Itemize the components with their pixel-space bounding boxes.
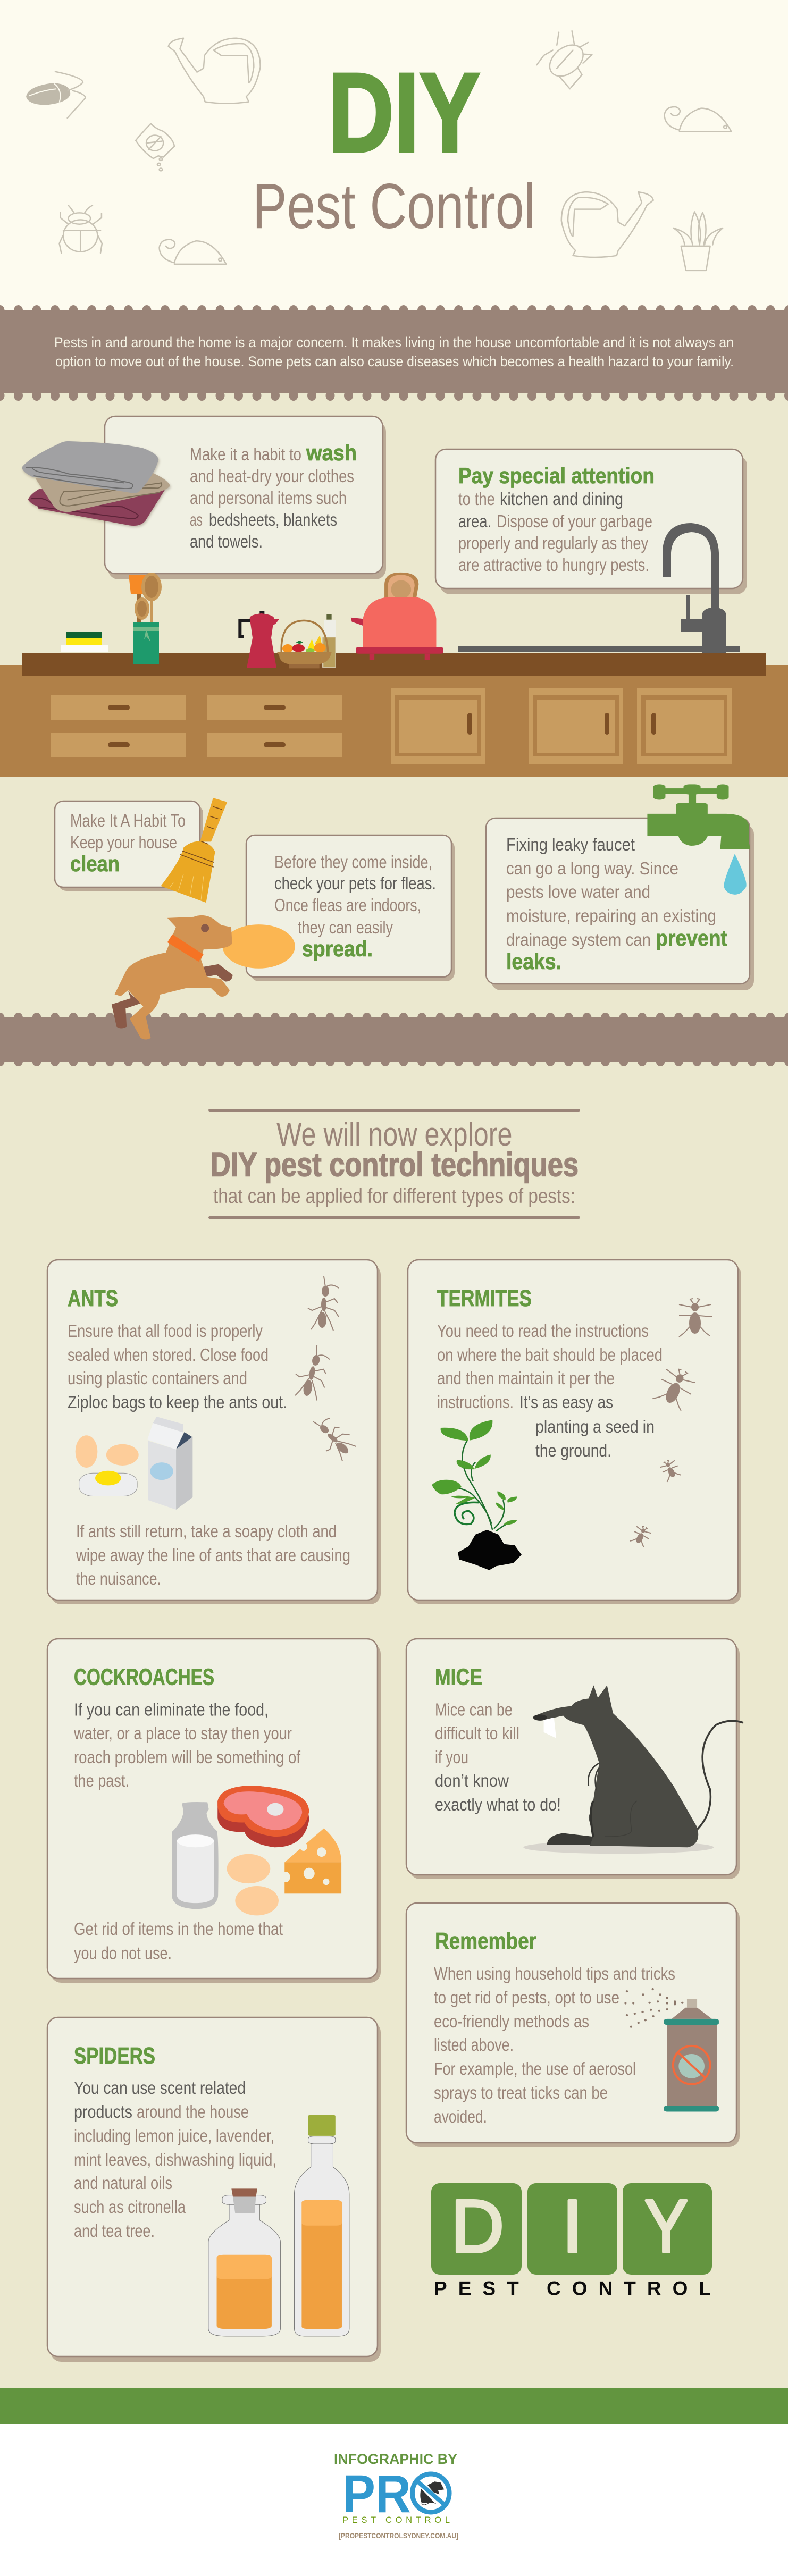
panel: keep clean (55, 801, 203, 891)
heading: techniques intro: We will now explore (276, 1116, 513, 1153)
logo: DIY Pest Control: D (451, 2184, 504, 2268)
text: termites advice: on where the bait should be placed (437, 1345, 663, 1365)
panel: wash: and towels. (190, 532, 263, 551)
icon: sink and tap (458, 523, 740, 653)
icon: eggs and milk carton (76, 1417, 192, 1510)
panel: keep clean: Keep your house (70, 832, 177, 852)
panel: spiders (47, 2017, 381, 2362)
text: remember advice: avoided. (434, 2107, 487, 2126)
panel: fleas: spread. (302, 936, 373, 961)
panel: leaky faucet: pests love water and (506, 882, 650, 902)
panel: wash: bedsheets, blankets (209, 510, 337, 529)
text: mice advice: difficult to kill (435, 1723, 519, 1743)
panel: kitchen attention: kitchen and dining (500, 489, 623, 509)
icon: coffee pot and fruit basket (238, 611, 336, 668)
panel: ants (47, 1260, 381, 1604)
text: termites advice (437, 1321, 663, 1460)
panel: leaky faucet: can go a long way. Since (506, 858, 678, 878)
text: ants advice: using plastic containers and (68, 1368, 247, 1388)
band: introduction: Pests in and around the home is a major concern. It makes living in the house uncomfortable and it is not always an (54, 334, 734, 350)
text: cockroaches advice: water, or a place to stay then your (73, 1723, 292, 1743)
icon: utensil jar (129, 573, 162, 664)
text: mice advice: Mice can be (435, 1700, 513, 1719)
icons: termites (630, 1299, 712, 1548)
panel: wash (105, 416, 386, 579)
band: divider with scallops (0, 1013, 788, 1066)
text: cockroaches advice: Get rid of items in the home that (74, 1919, 283, 1939)
text: ants advice: If ants still return, take a soapy cloth and (76, 1521, 337, 1541)
panel: keep clean: Make It A Habit To (70, 811, 186, 830)
panel: kitchen attention: properly and regularly as they (458, 533, 648, 553)
text: cockroaches advice: roach problem will be something of (74, 1747, 301, 1767)
logo: DIY Pest Control: I (562, 2184, 583, 2268)
panel: fleas (246, 835, 455, 981)
band: green footer strip (0, 2388, 788, 2424)
text: cockroaches advice: the past. (74, 1771, 129, 1790)
heading: mice: MICE (435, 1664, 482, 1690)
panel: kitchen attention: area. (458, 511, 491, 531)
cabinet doors (391, 688, 732, 764)
text: mice advice (435, 1700, 561, 1814)
text: termites advice: and then maintain it per the (437, 1368, 615, 1388)
panel: cockroaches (47, 1639, 381, 1983)
panel: fleas: they can easily (298, 917, 393, 937)
text: remember advice: When using household tips and tricks (434, 1964, 675, 1983)
icon: faucet and drop (647, 784, 750, 895)
icon: broom (161, 798, 227, 903)
icon: aerosol spray (624, 1988, 719, 2112)
icon: watering can right (561, 192, 653, 257)
icon: seedling (432, 1420, 522, 1570)
footer: credit: PEST CONTROL (342, 2515, 450, 2525)
text: termites advice: You need to read the instructions (437, 1321, 649, 1341)
band: introduction: option to move out of the house. Some pets can also cause diseases which becomes a health hazard to your family. (55, 353, 734, 369)
text: remember advice (434, 1964, 675, 2126)
text: remember advice: eco-friendly methods as (434, 2011, 589, 2031)
icon: potted plant (674, 212, 723, 271)
panel: wash: Make it a habit to (190, 444, 301, 464)
icon: no-rat ring (412, 2474, 449, 2512)
text: ants advice (68, 1321, 350, 1588)
panel: fleas: Once fleas are indoors, (274, 895, 421, 915)
icon: beetle top (536, 31, 592, 89)
panel: leaky faucet: moisture, repairing an existing (506, 906, 716, 925)
text: termites advice: instructions. (437, 1392, 514, 1412)
drawers (51, 695, 342, 757)
panel: kitchen attention: Pay special attention (458, 463, 655, 488)
text: remember advice: For example, the use of aerosol (434, 2059, 636, 2078)
text: ants advice: Ziploc bags to keep the ants out. (68, 1392, 287, 1412)
icon: mouse left (160, 240, 226, 264)
panel: wash: as (190, 510, 203, 529)
panel: kitchen attention: to the (458, 489, 495, 509)
text: remember advice: to get rid of pests, opt to use (434, 1988, 619, 2007)
icon: rat (523, 1685, 743, 1854)
text: ants advice: wipe away the line of ants that are causing (76, 1545, 350, 1565)
text: termites advice: the ground. (535, 1441, 611, 1460)
heading: cockroaches: COCKROACHES (74, 1664, 214, 1690)
panel: remember (406, 1903, 740, 2147)
title: Pest Control: Pest Control (253, 171, 535, 242)
panel: wash: and personal items such (190, 488, 347, 508)
text: termites advice: planting a seed in (535, 1417, 655, 1436)
text: spiders advice (74, 2078, 276, 2241)
icon: beetle left (60, 205, 102, 253)
text: mice advice: exactly what to do! (435, 1795, 561, 1814)
text: cockroaches advice (73, 1700, 301, 1963)
panel: fleas: check your pets for fleas. (274, 873, 436, 893)
heading: techniques intro: that can be applied for different types of pests: (213, 1185, 575, 1208)
logo: DIY Pest Control (431, 2183, 712, 2300)
panel: keep clean: clean (70, 851, 120, 876)
text: ants advice: the nuisance. (76, 1569, 161, 1588)
heading: ants: ANTS (68, 1285, 118, 1311)
text: spiders advice: products (74, 2102, 132, 2122)
text: spiders advice: and tea tree. (74, 2221, 155, 2241)
icon: sponge (61, 632, 108, 652)
text: mice advice: don’t know (435, 1771, 509, 1790)
panel: kitchen attention: are attractive to hungry pests. (458, 555, 649, 575)
icon: watering can (169, 38, 261, 104)
panel: leaky faucet: leaks. (506, 949, 561, 974)
icon: bait packet (136, 124, 174, 171)
icons: ants (292, 1276, 359, 1464)
icon: dog with ball (112, 915, 295, 1040)
panel: leaky faucet (486, 818, 754, 990)
illustration: kitchen counter (0, 653, 788, 777)
icon: toaster (351, 573, 443, 660)
heading: remember: Remember (435, 1928, 536, 1954)
panel: leaky faucet: drainage system can (506, 930, 651, 949)
text: termites advice: It’s as easy as (519, 1392, 613, 1412)
panel: leaky faucet: Fixing leaky faucet (506, 835, 635, 854)
text: ants advice: sealed when stored. Close food (68, 1345, 269, 1365)
text: cockroaches advice: you do not use. (74, 1943, 172, 1963)
icon: milk, meat, eggs and cheese (172, 1786, 341, 1915)
title: DIY: DIY (328, 49, 480, 175)
logo: DIY Pest Control: PEST CONTROL (434, 2277, 711, 2300)
heading: spiders: SPIDERS (74, 2043, 155, 2069)
panel: termites (408, 1260, 741, 1604)
icon: oil bottles (208, 2115, 349, 2336)
panel: kitchen attention: Dispose of your garbage (497, 511, 652, 531)
text: ants advice: Ensure that all food is properly (68, 1321, 263, 1341)
text: spiders advice: mint leaves, dishwashing liquid, (74, 2150, 276, 2169)
panel: wash: wash (306, 440, 357, 465)
icon: cockroach (26, 72, 86, 118)
panel: mice (406, 1639, 743, 1879)
footer: credit: INFOGRAPHIC BY (334, 2451, 457, 2467)
text: spiders advice: You can use scent related (74, 2078, 246, 2098)
icon: folded towels (22, 441, 170, 526)
footer: credit: PR (342, 2464, 411, 2524)
panel: wash: and heat-dry your clothes (190, 466, 354, 486)
footer: credit (334, 2451, 458, 2540)
header line-art icons (26, 31, 731, 271)
heading: termites: TERMITES (437, 1285, 532, 1311)
heading: techniques intro (208, 1109, 580, 1219)
text: mice advice: if you (435, 1747, 468, 1767)
text: spiders advice: such as citronella (74, 2197, 186, 2217)
text: remember advice: listed above. (434, 2035, 514, 2055)
text: spiders advice: and natural oils (74, 2173, 172, 2193)
footer: credit: [PROPESTCONTROLSYDNEY.COM.AU] (339, 2531, 458, 2540)
icon: mouse right (665, 107, 731, 131)
text: spiders advice: around the house (137, 2102, 249, 2122)
text: cockroaches advice: If you can eliminate the food, (74, 1700, 269, 1719)
panel: fleas: Before they come inside, (274, 852, 432, 872)
text: remember advice: sprays to treat ticks can be (434, 2083, 608, 2102)
logo: DIY Pest Control: Y (644, 2184, 688, 2268)
heading: techniques intro: DIY pest control techniques (211, 1147, 579, 1184)
text: spiders advice: including lemon juice, lavender, (74, 2126, 274, 2145)
band: introduction (0, 305, 788, 401)
panel: kitchen attention (435, 449, 747, 594)
panel: leaky faucet: prevent (656, 925, 727, 950)
